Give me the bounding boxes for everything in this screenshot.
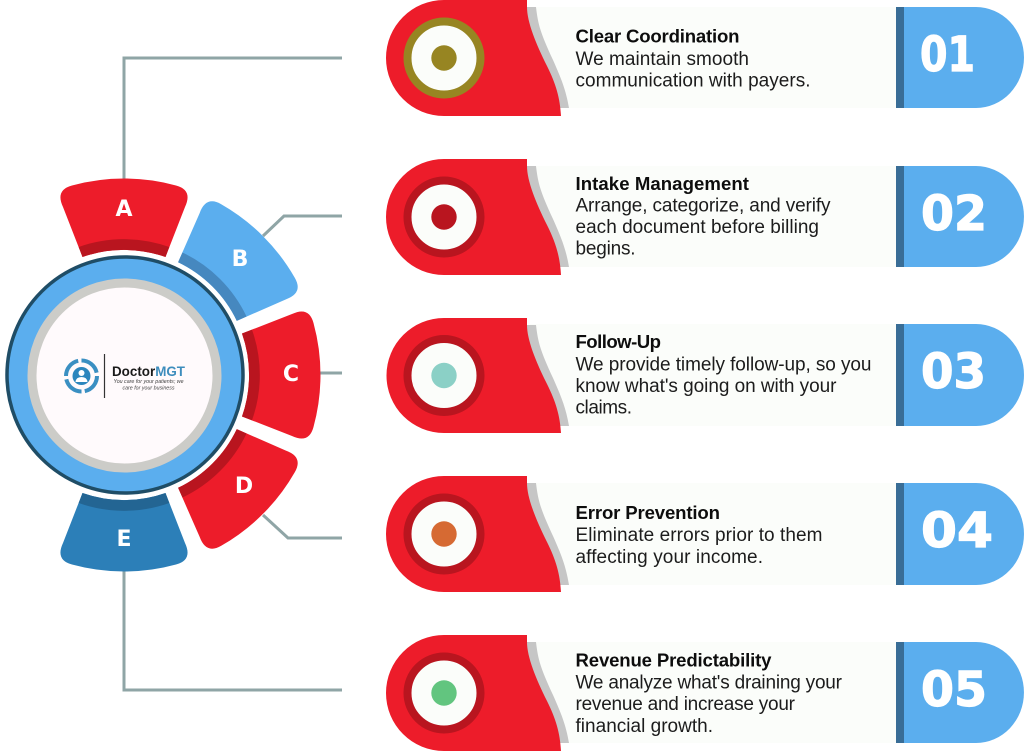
row 1 gray fold [527, 7, 569, 108]
center circle [7, 257, 243, 493]
segment C [242, 311, 320, 439]
row 1 red tab [386, 0, 561, 116]
row 2 text: each document before billing [576, 217, 819, 238]
row 5 card [530, 642, 900, 743]
row 1 text: communication with payers. [576, 70, 810, 92]
row 3 text: know what's going on with your [576, 376, 837, 397]
row 5 text: Revenue Predictability [576, 650, 772, 670]
row 2 number badge: 02 [921, 186, 987, 242]
row 3 red tab [386, 318, 561, 433]
segment D [162, 413, 308, 559]
row 1 number badge [896, 7, 1024, 108]
row 3 text: claims. [576, 398, 632, 418]
row 2 card [530, 166, 900, 267]
row 2 gray fold [527, 166, 569, 267]
row 5 number badge: 05 [921, 662, 987, 718]
row 5 number badge [896, 642, 1024, 743]
connector lines [124, 58, 342, 690]
row 4 text: Eliminate errors prior to them [576, 525, 822, 546]
segment A: A [115, 197, 133, 222]
row 1: Clear Coordination [386, 0, 1024, 116]
row 4 text: Error Prevention [576, 502, 720, 523]
row 2 red tab [386, 159, 561, 275]
segment E: E [116, 527, 132, 552]
row 4 text: affecting your income. [576, 547, 763, 568]
row 2: Intake Management [386, 159, 1024, 275]
row 4 number badge: 04 [921, 503, 993, 559]
row 5 target icon [408, 656, 480, 730]
row 4 number badge [896, 483, 1024, 585]
logo tagline: You care for your patients; we [113, 379, 184, 385]
row 5: Revenue Predictability [386, 635, 1024, 751]
segment B: B [232, 247, 248, 272]
row 4 text [576, 502, 822, 568]
row 3 target icon [408, 339, 480, 412]
row 2 text: begins. [576, 238, 636, 260]
row 5 red tab [386, 635, 561, 751]
row 5 text: We analyze what's draining your [576, 672, 843, 694]
segment B [162, 191, 308, 337]
row 3 text: We provide timely follow-up, so you [576, 354, 872, 376]
logo wordmark: DoctorMGT [112, 364, 186, 379]
row 1 text: We maintain smooth [576, 49, 749, 70]
row 1 text: Clear Coordination [576, 26, 740, 46]
row 4: Error Prevention [386, 476, 1024, 592]
row 5 gray fold [527, 642, 569, 743]
segment E [60, 493, 188, 571]
segment D: D [235, 474, 253, 499]
row 3 card [530, 324, 900, 426]
row 1 number badge: 01 [920, 27, 975, 83]
row 5 text: financial growth. [576, 716, 713, 737]
logo emblem [66, 360, 97, 392]
row 1 card [530, 7, 900, 108]
row 3 gray fold [527, 325, 569, 426]
row 4 red tab [386, 476, 561, 592]
segment C: C [283, 362, 299, 387]
row 3 text [576, 331, 872, 418]
row 5 text [576, 650, 843, 737]
row 2 text: Intake Management [576, 173, 749, 194]
row 3 number badge: 03 [921, 344, 986, 400]
logo tagline: care for your business [122, 386, 175, 392]
row 4 target icon [408, 498, 480, 570]
row 2 text [576, 173, 831, 260]
row 5 text: revenue and increase your [576, 694, 796, 715]
row 1 target icon [408, 22, 480, 94]
logo [66, 354, 186, 398]
row 1 text [576, 26, 810, 92]
row 4 card [530, 483, 900, 585]
row 2 number badge [896, 166, 1024, 267]
row 4 gray fold [527, 483, 569, 585]
row 3 text: Follow-Up [576, 331, 661, 352]
row 2 target icon [408, 180, 480, 254]
row 3: Follow-Up [386, 318, 1024, 433]
row 2 text: Arrange, categorize, and verify [576, 196, 831, 216]
row 3 number badge [896, 324, 1024, 426]
segment A [60, 179, 188, 257]
